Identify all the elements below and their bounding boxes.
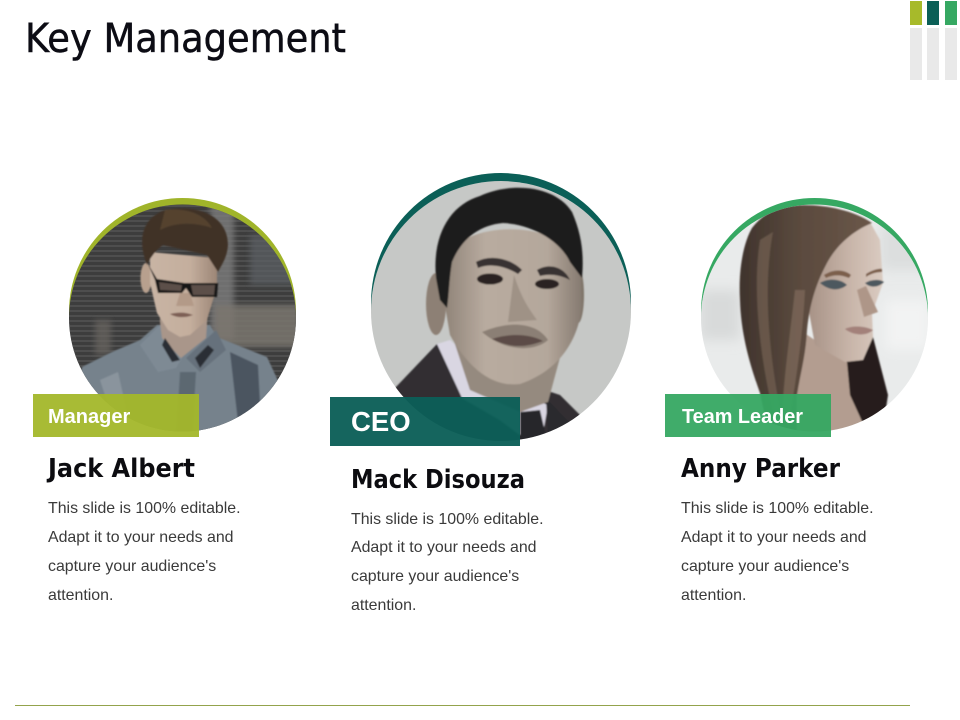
description text: capture your audience's — [681, 558, 849, 575]
portrait ring: green arc — [701, 198, 928, 425]
description text: This slide is 100% editable. — [681, 500, 874, 517]
corner decoration: three coloured bars — [910, 1, 957, 80]
name: Mack Disouza: Mack Disouza — [351, 465, 525, 495]
portrait ring: lime arc — [69, 198, 296, 425]
description text: attention. — [681, 587, 746, 604]
description text: Adapt it to your needs and — [681, 529, 867, 546]
role label: Team Leader — [665, 394, 831, 437]
description text: attention. — [48, 587, 113, 604]
role label: Manager — [33, 394, 199, 437]
panel: Jack Albert, Manager — [33, 195, 305, 604]
description text: capture your audience's — [48, 558, 216, 575]
role label: CEO — [330, 397, 520, 446]
description text: capture your audience's — [351, 568, 519, 585]
panel: Anny Parker, Team Leader — [665, 195, 935, 604]
title: Key Management — [25, 16, 346, 62]
description text: This slide is 100% editable. — [351, 511, 544, 528]
panel: Mack Disouza, CEO — [330, 173, 640, 614]
name: Anny Parker: Anny Parker — [681, 454, 840, 484]
description text: Adapt it to your needs and — [48, 529, 234, 546]
role label: CEO: CEO — [351, 406, 411, 437]
description text: Adapt it to your needs and — [351, 539, 537, 556]
description text: attention. — [351, 597, 416, 614]
role label: Manager: Manager — [48, 406, 130, 428]
description text — [351, 511, 544, 614]
portrait photo: Anny Parker — [701, 204, 928, 430]
description text: This slide is 100% editable. — [48, 500, 241, 517]
description text — [48, 500, 241, 604]
portrait photo: Jack Albert — [69, 204, 296, 432]
portrait ring: teal arc — [371, 173, 631, 433]
role label: Team Leader: Team Leader — [682, 406, 803, 428]
name: Jack Albert: Jack Albert — [46, 454, 195, 484]
portrait photo: Mack Disouza — [371, 181, 631, 441]
description text — [681, 500, 874, 604]
